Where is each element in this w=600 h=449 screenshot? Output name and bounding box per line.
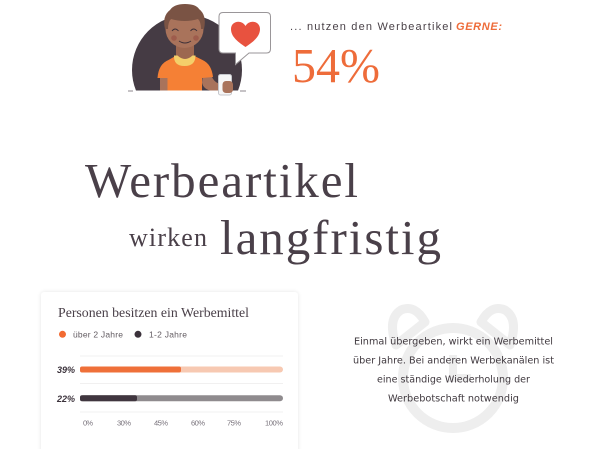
title: langfristig: [220, 210, 441, 265]
text: nutzen den Werbeartikel gerne: ... nutzen den Werbeartikel: [290, 21, 452, 33]
icon: dark circle background: [132, 18, 242, 90]
neck: [176, 44, 194, 60]
bar: 39%: 39%: [57, 365, 75, 375]
text block: explanation: eine ständige Wiederholung der: [377, 374, 530, 386]
icon: speech bubble with heart: [219, 12, 270, 64]
text block: explanation: [353, 336, 554, 404]
face: [166, 10, 204, 48]
axis labels: 100%: [265, 418, 283, 428]
axis labels: 75%: [227, 418, 241, 428]
illustration: smiling person with phone and heart speech bubble: [128, 4, 271, 96]
collar: [174, 56, 196, 66]
axis labels: [83, 418, 283, 428]
hair: [164, 4, 205, 29]
left arm: [160, 76, 169, 90]
text block: explanation: über Jahre. Bei anderen Werbekanälen ist: [353, 356, 554, 366]
panel: chart card: [41, 292, 298, 449]
right arm: [202, 74, 220, 90]
bar: 22%: [56, 394, 283, 404]
icon: person: [158, 4, 220, 90]
legend: 1-2 Jahre: [149, 329, 187, 339]
title: [85, 153, 441, 265]
title: wirken: [129, 223, 207, 252]
axis labels: 45%: [154, 418, 168, 428]
big number: 54%: 54%: [292, 38, 380, 93]
shirt: [158, 56, 213, 90]
text block: explanation: Einmal übergeben, wirkt ein Werbemittel: [354, 336, 553, 348]
axis labels: 30%: [117, 418, 131, 428]
bar: 22%: 22%: [56, 394, 75, 404]
legend: [59, 329, 187, 339]
chart heading: Personen besitzen ein Werbemittel: [58, 306, 249, 321]
text: nutzen den Werbeartikel gerne: GERNE:: [456, 21, 502, 33]
icon: phone: [218, 74, 233, 95]
axis labels: 0%: [83, 418, 93, 428]
title: Werbeartikel: [85, 153, 358, 208]
text block: explanation: Werbebotschaft notwendig: [388, 394, 519, 404]
bar: 39%: [57, 365, 283, 375]
icon: alarm clock watermark: [392, 308, 514, 428]
axis labels: 60%: [191, 418, 205, 428]
bar chart: [56, 356, 283, 428]
legend: über 2 Jahre: [73, 329, 123, 339]
